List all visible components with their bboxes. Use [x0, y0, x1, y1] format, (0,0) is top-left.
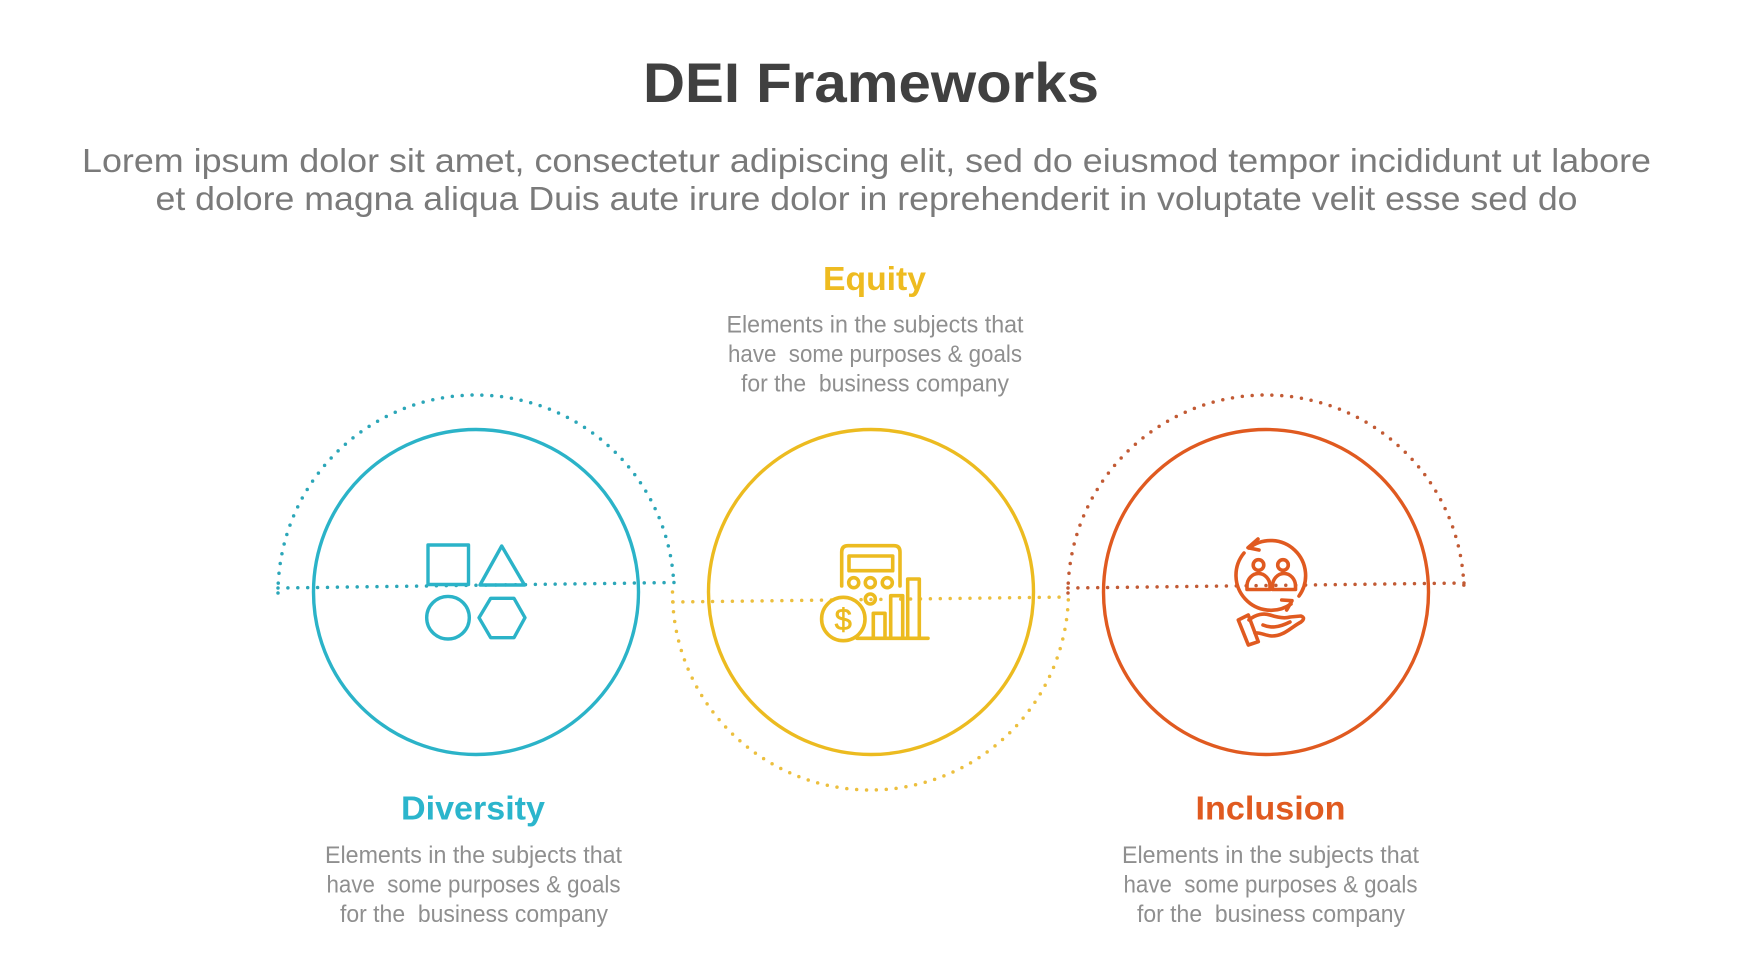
icon: people in cycle held by hand — [1236, 539, 1306, 645]
description: equity: Elements in the subjects that — [726, 312, 1024, 338]
description: equity: have some purposes & goals — [728, 341, 1022, 368]
description: diversity — [325, 842, 622, 928]
description: inclusion: have some purposes & goals — [1124, 872, 1418, 898]
label: diversity — [325, 790, 622, 928]
dotted half circle: inclusion — [1068, 395, 1464, 593]
dotted half circle: diversity — [278, 395, 674, 593]
heading: diversity: Diversity — [401, 790, 546, 826]
circle: diversity — [314, 430, 638, 754]
description: inclusion: for the business company — [1137, 901, 1405, 928]
circle: equity — [708, 430, 1034, 754]
subtitle text block — [82, 142, 1651, 217]
title: DEI Frameworks — [643, 51, 1099, 114]
subtitle text block: et dolore magna aliqua Duis aute irure dolor in reprehenderit in voluptate velit esse sed do — [156, 180, 1578, 217]
heading: inclusion: Inclusion — [1196, 790, 1346, 826]
label: equity — [726, 260, 1024, 398]
heading: equity: Equity — [823, 260, 927, 297]
description: diversity: Elements in the subjects that — [325, 842, 622, 869]
description: equity: for the business company — [741, 370, 1009, 398]
dotted half circle: equity — [672, 592, 1068, 790]
description: diversity: have some purposes & goals — [326, 872, 620, 898]
subtitle text block: Lorem ipsum dolor sit amet, consectetur adipiscing elit, sed do eiusmod tempor incididunt ut labore — [82, 142, 1651, 179]
icon: calculator with coin and bars: $ — [835, 602, 852, 637]
icon: calculator with coin and bars — [822, 546, 928, 641]
description: equity — [726, 312, 1024, 398]
description: inclusion: Elements in the subjects that — [1122, 842, 1419, 869]
description: diversity: for the business company — [340, 901, 608, 928]
label: inclusion — [1122, 790, 1419, 928]
icon: geometric shapes — [427, 545, 525, 639]
description: inclusion — [1122, 842, 1419, 928]
circle: inclusion — [1104, 430, 1428, 754]
